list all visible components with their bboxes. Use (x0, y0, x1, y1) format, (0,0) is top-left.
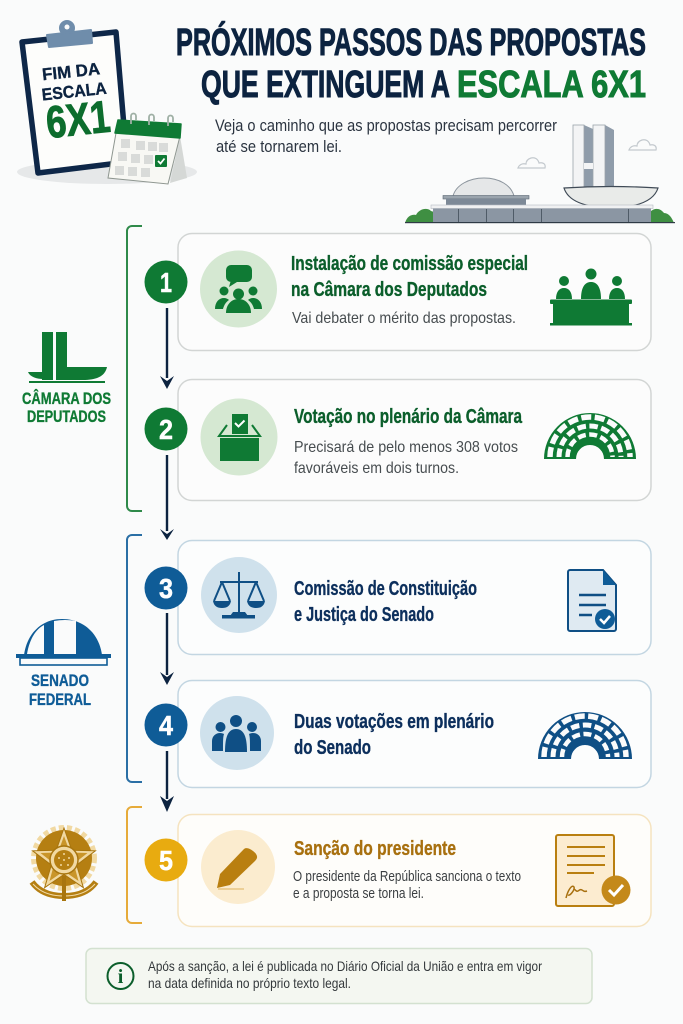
badge 4 (144, 704, 188, 746)
step text: na Câmara dos Deputados (291, 279, 487, 301)
step text: e Justiça do Senado (294, 604, 434, 626)
badge 1 (144, 260, 188, 304)
arrow: 1 to 2 (160, 308, 174, 389)
step text (294, 711, 494, 759)
step text (293, 838, 521, 902)
badge 3 (144, 566, 188, 610)
badge 2: 2 (159, 414, 173, 445)
icon: plenary hemicycle (550, 417, 630, 459)
icon: pen (201, 830, 275, 904)
section label: Senado Federal: SENADO (31, 671, 89, 690)
step text (294, 578, 477, 626)
clipboard: FIM DA (41, 59, 101, 84)
section bracket: Senado (127, 535, 142, 782)
icon: Brazilian coat of arms (32, 828, 96, 901)
callout text (148, 958, 542, 991)
step text: e a proposta se torna lei. (293, 886, 424, 902)
step text: Vai debater o mérito das propostas. (292, 310, 516, 327)
step text: Duas votações em plenário (294, 711, 494, 733)
arrow: 2 to 3 (160, 455, 174, 540)
illustration: Congresso Nacional (405, 125, 675, 223)
icon: document with check (568, 570, 616, 631)
subtitle: Veja o caminho que as propostas precisam percorrer (215, 116, 557, 135)
title (176, 20, 646, 106)
panel: step 2 (144, 380, 651, 500)
panel: step 4 (144, 680, 651, 788)
step text: Instalação de comissão especial (291, 253, 528, 275)
subtitle (215, 116, 557, 156)
icon: scales of justice (201, 557, 277, 633)
clipboard: 6X1 (44, 91, 113, 148)
step text: Precisará de pelo menos 308 votos (294, 439, 518, 456)
illustration: clipboard and calendar (17, 20, 197, 184)
callout: after sanction (86, 948, 592, 1004)
badge 5: 5 (159, 845, 173, 876)
clouds (518, 140, 656, 168)
subtitle: até se tornarem lei. (216, 137, 342, 156)
title: QUE EXTINGUEM A (201, 64, 450, 106)
calendar (108, 114, 187, 184)
section label: Senado Federal: FEDERAL (29, 690, 91, 709)
arrow: 4 to 5 (160, 751, 174, 812)
badge 4: 4 (159, 710, 173, 741)
badge 2 (144, 408, 188, 450)
panel: step 3 (144, 540, 651, 654)
section label: Câmara dos Deputados: CÂMARA DOS (22, 389, 111, 408)
section bracket: Presidência (127, 807, 142, 923)
step text: Sanção do presidente (294, 838, 456, 860)
badge 3: 3 (159, 573, 173, 604)
clipboard: ESCALA (41, 79, 107, 104)
panel: step 1 (144, 234, 651, 350)
badge 1: 1 (160, 267, 172, 298)
callout text: na data definida no próprio texto legal. (148, 975, 351, 991)
section label: Câmara dos Deputados: DEPUTADOS (27, 407, 106, 426)
icon: group of people (200, 696, 274, 770)
step text: O presidente da República sanciona o texto (293, 869, 521, 885)
step text (294, 406, 523, 477)
badge 5 (144, 838, 188, 882)
icon: Senado dome (16, 619, 111, 665)
clipboard (22, 20, 127, 173)
callout text: Após a sanção, a lei é publicada no Diário Oficial da União e entra em vigor (148, 958, 542, 974)
icon: information: i (118, 966, 124, 988)
step text: do Senado (294, 737, 371, 759)
step text: Comissão de Constituição (294, 578, 477, 600)
icon: people talking (200, 250, 277, 328)
section bracket: Câmara (127, 226, 142, 511)
step text: favoráveis em dois turnos. (294, 460, 459, 477)
icon: signed document (556, 835, 630, 906)
icon: Câmara (28, 332, 107, 383)
section label: Câmara dos Deputados (22, 332, 111, 426)
icon: ballot box (200, 398, 278, 476)
step text (291, 253, 528, 327)
arrow: 3 to 4 (160, 613, 174, 685)
step text: Votação no plenário da Câmara (294, 406, 523, 428)
icon: plenary hemicycle (544, 716, 626, 759)
icon: information (108, 963, 134, 989)
icon: committee at table (550, 268, 632, 326)
panel: step 5 (144, 814, 651, 926)
section label: Senado Federal (16, 619, 111, 709)
